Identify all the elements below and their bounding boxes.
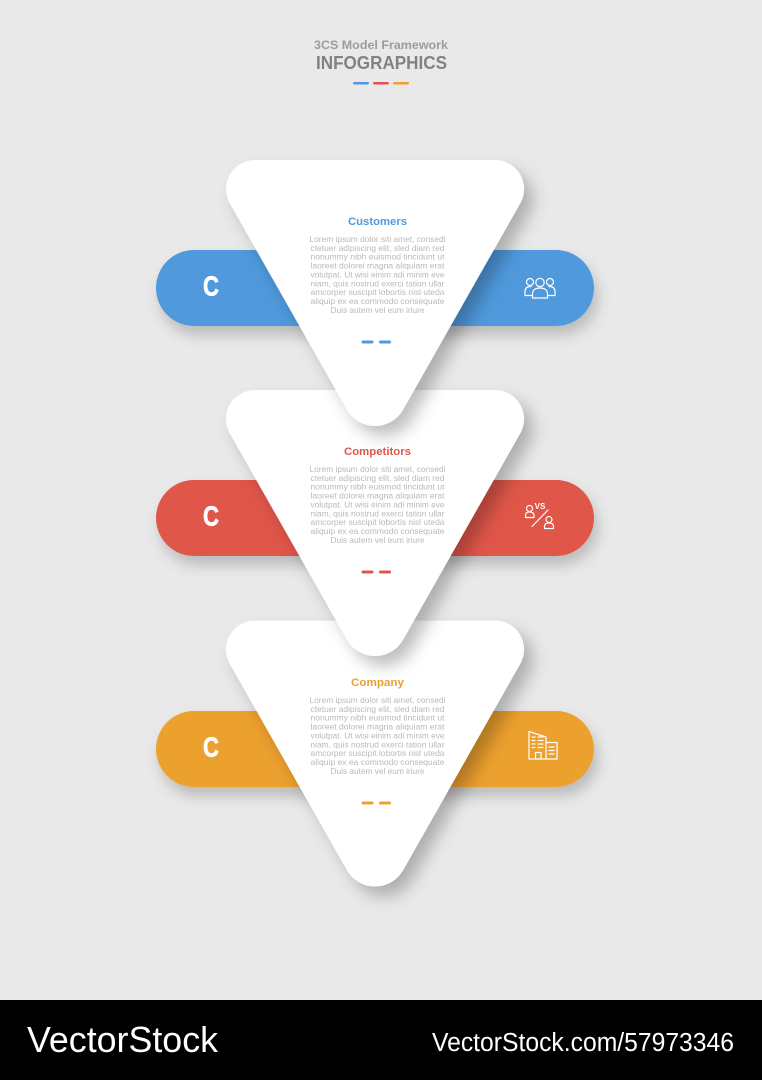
card: customers	[226, 160, 524, 426]
pill: company	[156, 711, 594, 787]
heading: company: Company	[351, 677, 405, 689]
text block: company: ctetuer adipiscing elit, sled diam red	[310, 705, 445, 714]
title colour dashes	[353, 82, 409, 84]
text block: company: nonummy nibh euismod tincidunt ut	[310, 714, 445, 723]
heading: competitors: Competitors	[344, 446, 411, 458]
text block: company: volutpat. Ut wisi einim adi minim eve	[310, 731, 445, 740]
pill: competitors	[156, 480, 594, 556]
text block: customers: volutpat. Ut wisi einim adi minim eve	[310, 270, 445, 279]
card: company	[226, 620, 524, 886]
section 2: competitors	[156, 390, 594, 656]
text block: company: aliquip ex ea commodo consequate	[310, 758, 445, 767]
card dashes: company	[362, 802, 391, 804]
section 1: customers	[156, 160, 594, 426]
text block: competitors: Lorem ipsum dolor siti amet, consedi	[310, 465, 446, 474]
text block: company: Duis autem vel eum iriure	[330, 767, 425, 776]
text block: customers: amcorper suscipit lobortis nisl uteda	[310, 288, 445, 297]
card dashes: customers	[362, 340, 391, 344]
text block: competitors: Duis autem vel eum iriure	[330, 536, 425, 545]
letter C: C	[203, 500, 219, 532]
icon: buildings	[529, 732, 557, 759]
letter C: C	[203, 270, 219, 302]
icon: versus	[526, 502, 554, 528]
main title: INFOGRAPHICS	[316, 53, 447, 73]
text block: company: niam, quis nostrud exerci tation ullar	[310, 740, 445, 749]
text block: competitors	[310, 465, 446, 545]
text block: competitors: niam, quis nostrud exerci tation ullar	[310, 509, 445, 518]
footer bar	[0, 1000, 762, 1080]
text block: competitors: amcorper suscipit lobortis nisl uteda	[310, 518, 445, 527]
text block: competitors: ctetuer adipiscing elit, sled diam red	[310, 474, 445, 483]
text block: customers: niam, quis nostrud exerci tation ullar	[310, 279, 445, 288]
icon: people	[525, 278, 555, 298]
text block: company: laoreet dolorei magna aliquiam erat	[310, 723, 445, 732]
section 3: company	[156, 620, 594, 886]
card: competitors	[226, 390, 524, 656]
text block: competitors: nonummy nibh euismod tincidunt ut	[310, 483, 445, 492]
pill: customers	[156, 250, 594, 326]
text block: company	[310, 696, 446, 776]
footer url: VectorStock.com/57973346	[432, 1029, 734, 1057]
text block: customers: Duis autem vel eum iriure	[330, 306, 425, 315]
footer logo text: VectorStock	[27, 1019, 219, 1060]
text block: customers	[310, 235, 446, 315]
text block: customers: Lorem ipsum dolor siti amet, consedi	[310, 235, 446, 244]
text block: competitors: aliquip ex ea commodo consequate	[310, 527, 445, 536]
letter C: C	[203, 732, 219, 762]
text block: competitors: volutpat. Ut wisi einim adi minim eve	[310, 500, 445, 509]
text block: competitors: laoreet dolorei magna aliquiam erat	[310, 492, 445, 501]
text block: customers: nonummy nibh euismod tincidunt ut	[310, 253, 445, 262]
text block: customers: aliquip ex ea commodo consequate	[310, 297, 445, 306]
card dashes: competitors	[362, 570, 391, 574]
text block: customers: laoreet dolorei magna aliquiam erat	[310, 262, 445, 271]
text block: company: Lorem ipsum dolor siti amet, consedi	[310, 696, 446, 705]
icon: versus: VS	[535, 502, 546, 511]
subtitle: 3CS Model Framework	[314, 38, 448, 52]
title block	[314, 38, 448, 84]
text block: company: amcorper suscipit lobortis nisl uteda	[310, 749, 445, 758]
heading: customers: Customers	[348, 216, 407, 228]
text block: customers: ctetuer adipiscing elit, sled diam red	[310, 244, 445, 253]
